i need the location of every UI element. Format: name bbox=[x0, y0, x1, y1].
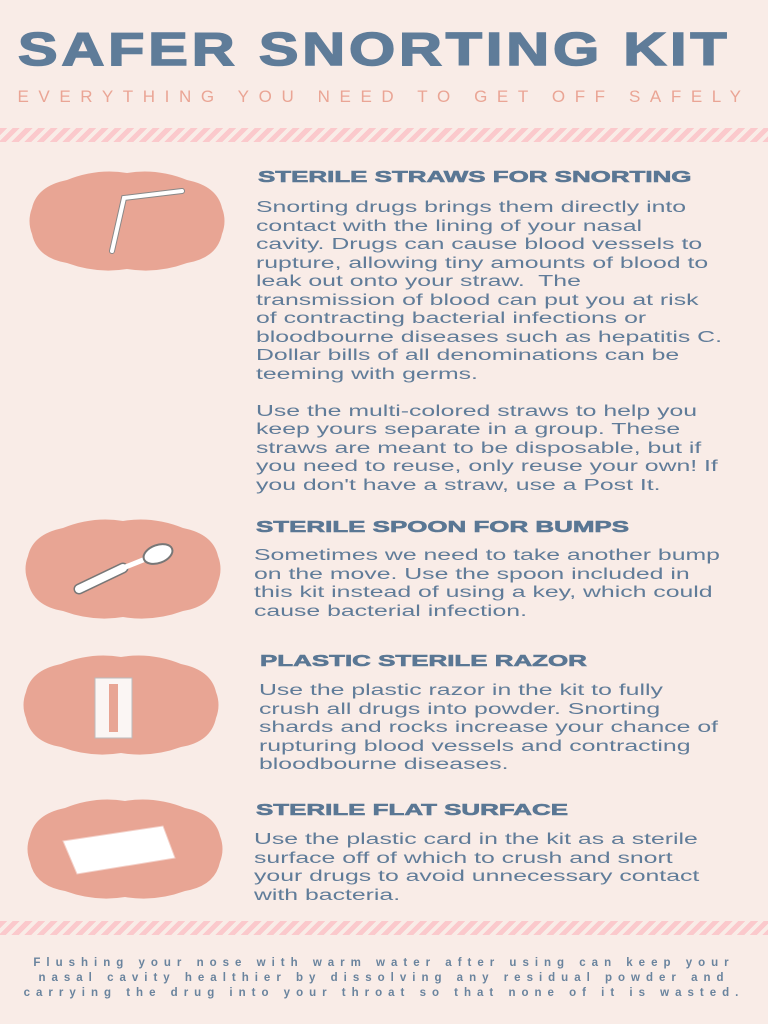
text: razor: bloodbourne diseases. bbox=[259, 756, 509, 773]
text: straws: of contracting bacterial infections or bbox=[256, 310, 646, 327]
text: straws: you don't have a straw, use a Post It. bbox=[256, 476, 661, 494]
text: straws: Dollar bills of all denominations can be bbox=[256, 347, 679, 364]
text: straws: transmission of blood can put you at risk bbox=[256, 292, 698, 308]
text: razor: Use the plastic razor in the kit to fully bbox=[259, 682, 663, 699]
text: razor: shards and rocks increase your chance of bbox=[259, 719, 718, 736]
text: surface: your drugs to avoid unnecessary contact bbox=[254, 868, 699, 885]
heading: spoon: STERILE SPOON FOR BUMPS bbox=[256, 519, 629, 536]
text: surface: surface off of which to crush and snort bbox=[254, 850, 673, 866]
text: spoon: cause bacterial infection. bbox=[254, 602, 527, 620]
icon: card blob bbox=[28, 800, 222, 899]
text: straws: rupture, allowing tiny amounts of blood to bbox=[256, 254, 708, 272]
text: straws: keep yours separate in a group. These bbox=[256, 421, 680, 438]
footer note: nasal cavity healthier by dissolving any residual powder and bbox=[38, 972, 730, 984]
text: razor: crush all drugs into powder. Snorting bbox=[259, 700, 660, 718]
heading: surface: STERILE FLAT SURFACE bbox=[256, 802, 568, 819]
footer note: Flushing your nose with warm water after using can keep your bbox=[33, 957, 735, 969]
text: straws: straws are meant to be disposable, but if bbox=[256, 440, 701, 456]
subtitle: EVERYTHING YOU NEED TO GET OFF SAFELY bbox=[17, 87, 751, 106]
text: spoon bbox=[254, 547, 720, 620]
text: straws bbox=[256, 199, 722, 494]
text: straws: bloodbourne diseases such as hepatitis C. bbox=[256, 328, 722, 346]
text: spoon: on the move. Use the spoon included in bbox=[254, 566, 690, 582]
text: surface: with bacteria. bbox=[254, 886, 400, 904]
title: SAFER SNORTING KIT bbox=[18, 23, 731, 75]
icon: straw blob bbox=[30, 172, 224, 271]
text: spoon: this kit instead of using a key, which could bbox=[254, 584, 713, 601]
text: razor bbox=[259, 682, 718, 773]
text: razor: rupturing blood vessels and contracting bbox=[259, 738, 691, 754]
text: straws: you need to reuse, only reuse your own! If bbox=[256, 458, 718, 475]
text: straws: teeming with germs. bbox=[256, 366, 478, 382]
footer note bbox=[24, 957, 744, 999]
heading: straws: STERILE STRAWS FOR SNORTING bbox=[258, 169, 691, 186]
heading: razor: PLASTIC STERILE RAZOR bbox=[260, 653, 587, 670]
text: surface bbox=[254, 831, 700, 904]
footer note: carrying the drug into your throat so that none of it is wasted. bbox=[24, 987, 744, 999]
icon: spoon blob bbox=[26, 520, 220, 619]
text: surface: Use the plastic card in the kit as a sterile bbox=[254, 831, 698, 848]
text: straws: Snorting drugs brings them directly into bbox=[256, 199, 686, 216]
text: straws: leak out onto your straw. The bbox=[256, 273, 581, 290]
text: straws: cavity. Drugs can cause blood vessels to bbox=[256, 236, 702, 253]
text: spoon: Sometimes we need to take another bump bbox=[254, 547, 720, 564]
text: straws: Use the multi-colored straws to help you bbox=[256, 402, 697, 420]
icon: razor blob bbox=[24, 656, 218, 755]
text: straws: contact with the lining of your nasal bbox=[256, 218, 642, 234]
